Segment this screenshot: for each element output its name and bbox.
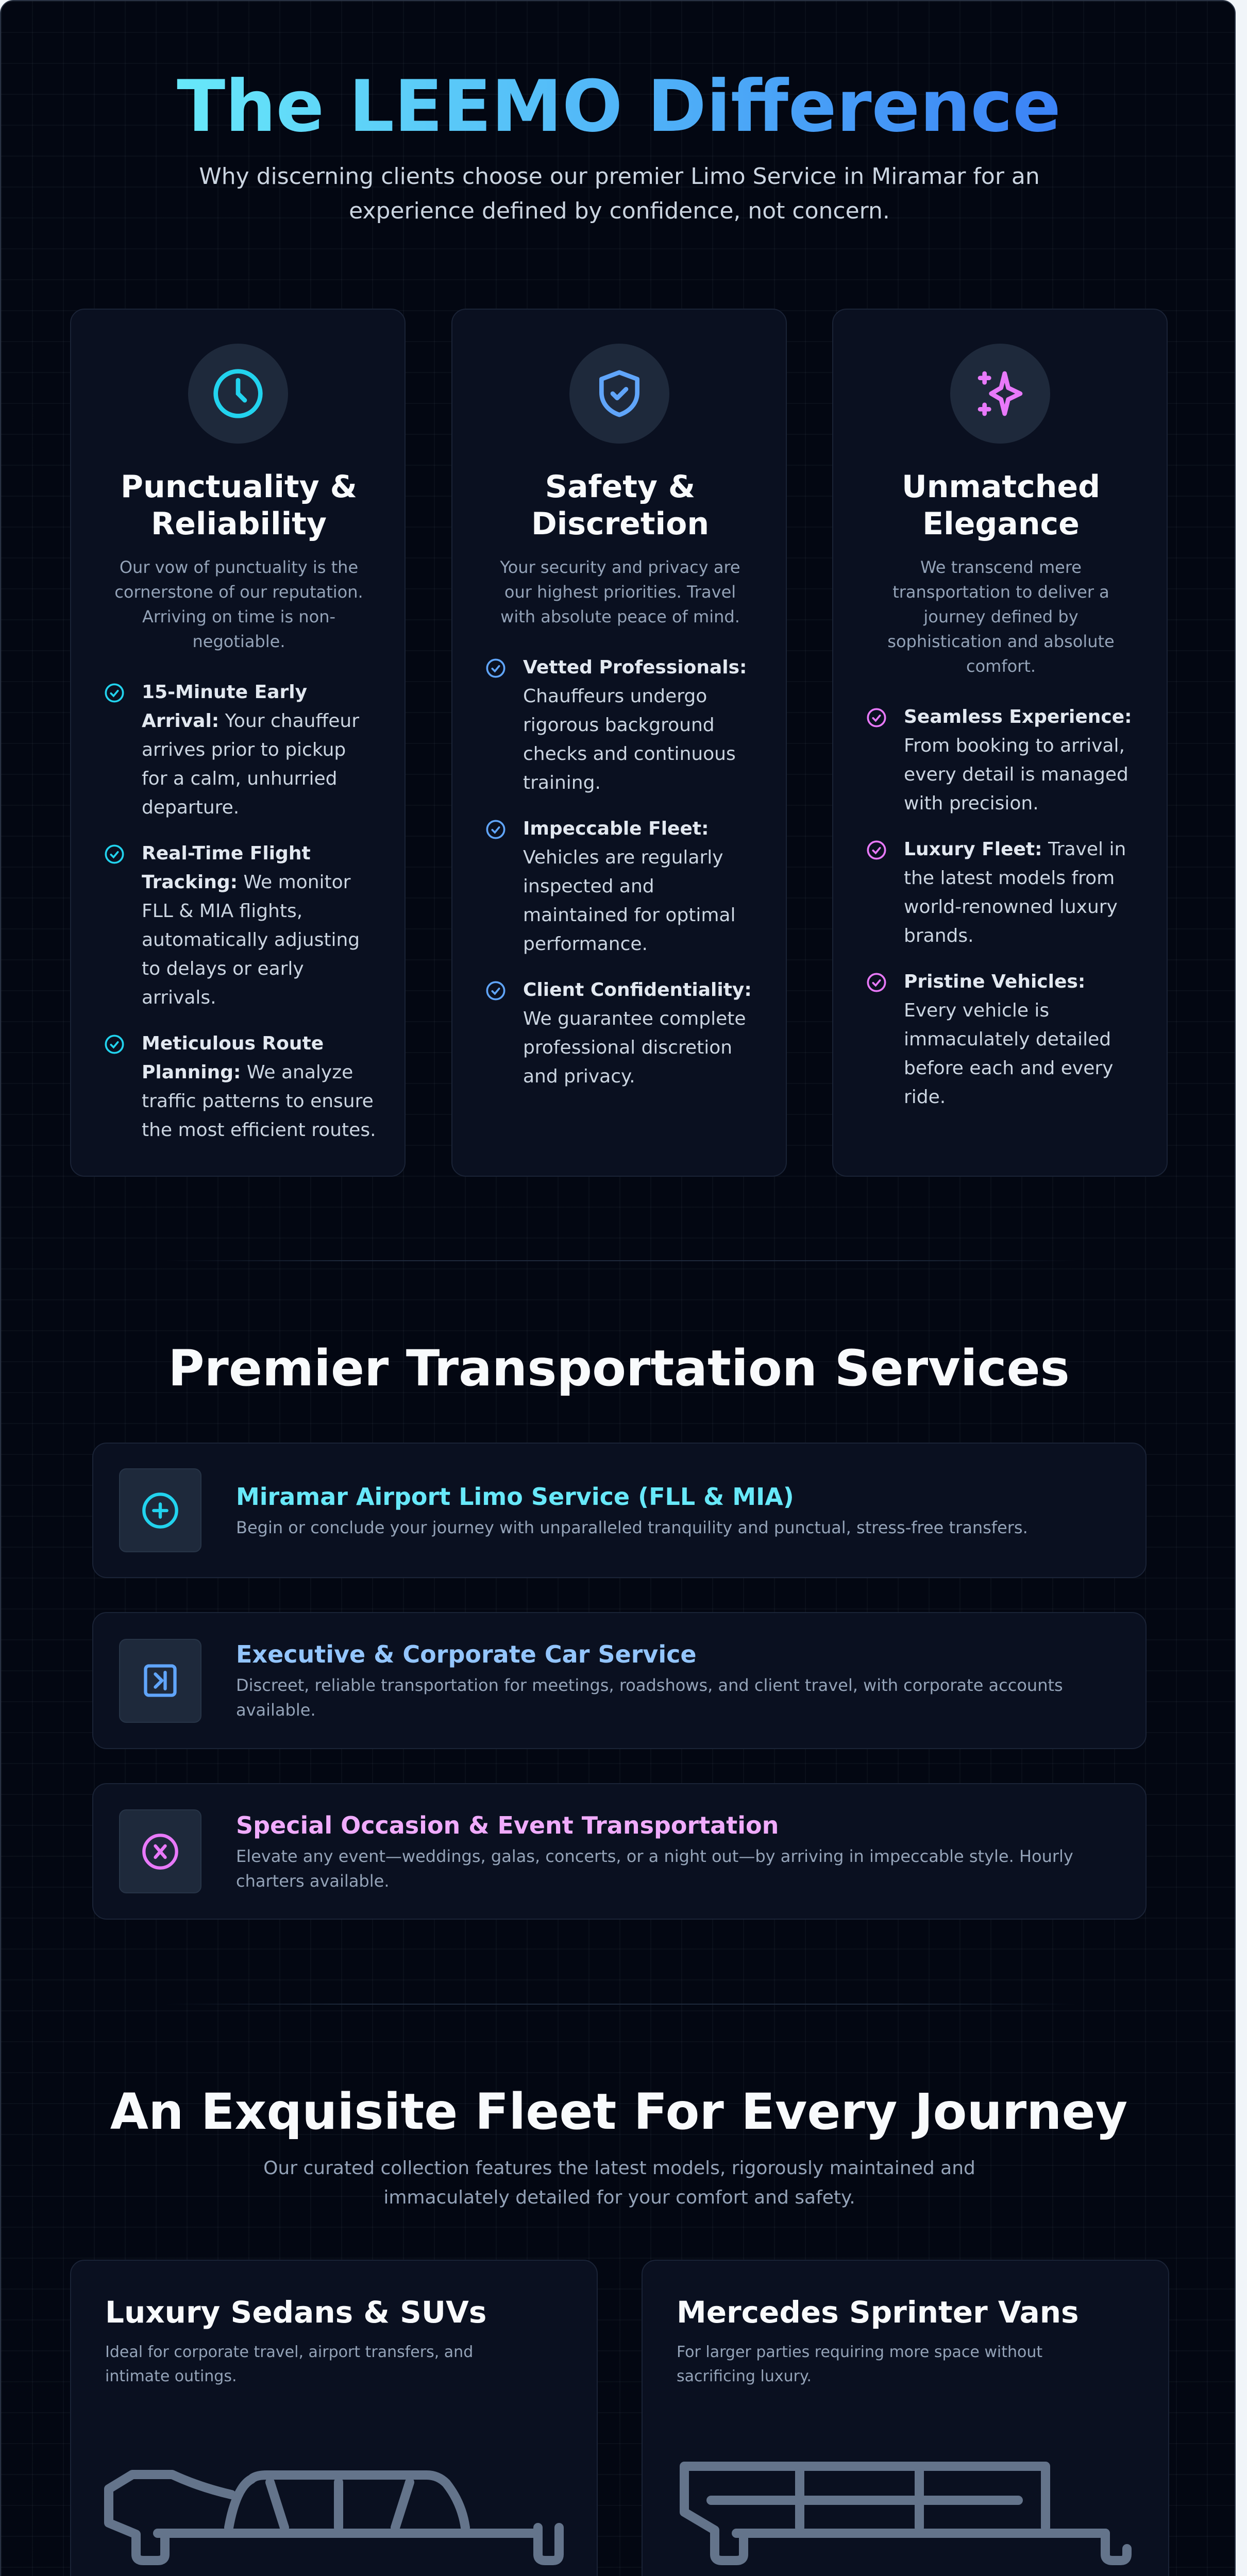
icon: square <box>119 1638 201 1723</box>
list: Vetted Professionals: Chauffeurs undergo rigorous background checks and continuous training. <box>523 657 747 793</box>
description: For larger parties requiring more space without sacrificing luxury. <box>677 2343 1042 2385</box>
heading: fleet: An Exquisite Fleet For Every Journey <box>110 2083 1127 2141</box>
text <box>236 1811 1073 1891</box>
list: Meticulous Route Planning: We analyze traffic patterns to ensure the most efficient routes. <box>142 1033 376 1141</box>
text: Miramar Airport Limo Service (FLL & MIA) <box>236 1483 794 1511</box>
text: Discreet, reliable transportation for meetings, roadshows, and client travel, with corporate accounts available. <box>236 1675 1063 1720</box>
text: Executive & Corporate Car Service <box>236 1640 697 1668</box>
icon: sedan <box>104 2470 564 2565</box>
service row: corporate <box>92 1612 1147 1749</box>
panel: safety <box>451 309 787 1177</box>
list: Client Confidentiality: We guarantee complete professional discretion and privacy. <box>523 979 752 1087</box>
icon: x circle <box>119 1809 201 1893</box>
text: Elevate any event—weddings, galas, concerts, or a night out—by arriving in impeccable style. Hourly charters available. <box>236 1846 1073 1891</box>
panel: punctuality <box>70 309 406 1177</box>
text: Special Occasion & Event Transportation <box>236 1811 779 1839</box>
text <box>236 1483 1028 1537</box>
panel: sedans <box>70 2260 598 2576</box>
icon: sparkles <box>950 344 1050 444</box>
heading: Unmatched Elegance <box>902 469 1100 542</box>
list: Seamless Experience: From booking to arrival, every detail is managed with precision. <box>904 706 1132 814</box>
heading: Punctuality & Reliability <box>121 469 357 542</box>
list <box>105 682 376 1141</box>
title: Mercedes Sprinter Vans <box>677 2295 1079 2330</box>
title: The LEEMO Difference <box>177 65 1061 148</box>
list: Pristine Vehicles: Every vehicle is immaculately detailed before each and every ride. <box>904 971 1113 1108</box>
service row: airport <box>92 1443 1147 1578</box>
icon: van <box>680 2462 1132 2565</box>
list: Real-Time Flight Tracking: We monitor FLL & MIA flights, automatically adjusting to delays or early arrivals. <box>142 843 360 1008</box>
description: Our vow of punctuality is the cornerstone of our reputation. Arriving on time is non-negotiable. <box>114 557 363 651</box>
list <box>486 657 752 1087</box>
icon: plus circle <box>119 1468 201 1552</box>
text <box>236 1640 1063 1720</box>
icon: shield <box>569 344 669 444</box>
description: Your security and privacy are our highest priorities. Travel with absolute peace of mind. <box>500 557 740 626</box>
subtitle: Why discerning clients choose our premier Limo Service in Miramar for an experience defined by confidence, not concern. <box>199 163 1040 224</box>
list: Impeccable Fleet: Vehicles are regularly inspected and maintained for optimal performance. <box>523 818 735 955</box>
icon: clock <box>188 344 288 444</box>
fleet subtitle: Our curated collection features the latest models, rigorously maintained and immaculately detailed for your comfort and safety. <box>263 2158 975 2208</box>
title: Luxury Sedans & SUVs <box>105 2295 486 2330</box>
panel: elegance <box>832 309 1168 1177</box>
list: Luxury Fleet: Travel in the latest models from world-renowned luxury brands. <box>904 839 1126 946</box>
list <box>867 706 1132 1108</box>
service row: events <box>92 1783 1147 1920</box>
heading: Safety & Discretion <box>531 469 709 542</box>
list: 15-Minute Early Arrival: Your chauffeur arrives prior to pickup for a calm, unhurried departure. <box>142 682 359 818</box>
heading: services: Premier Transportation Services <box>168 1340 1070 1397</box>
text: Begin or conclude your journey with unparalleled tranquility and punctual, stress-free transfers. <box>236 1518 1028 1537</box>
description: Ideal for corporate travel, airport transfers, and intimate outings. <box>105 2343 473 2385</box>
panel: sprinter <box>642 2260 1169 2576</box>
description: We transcend mere transportation to deliver a journey defined by sophistication and absolute comfort. <box>887 557 1115 676</box>
